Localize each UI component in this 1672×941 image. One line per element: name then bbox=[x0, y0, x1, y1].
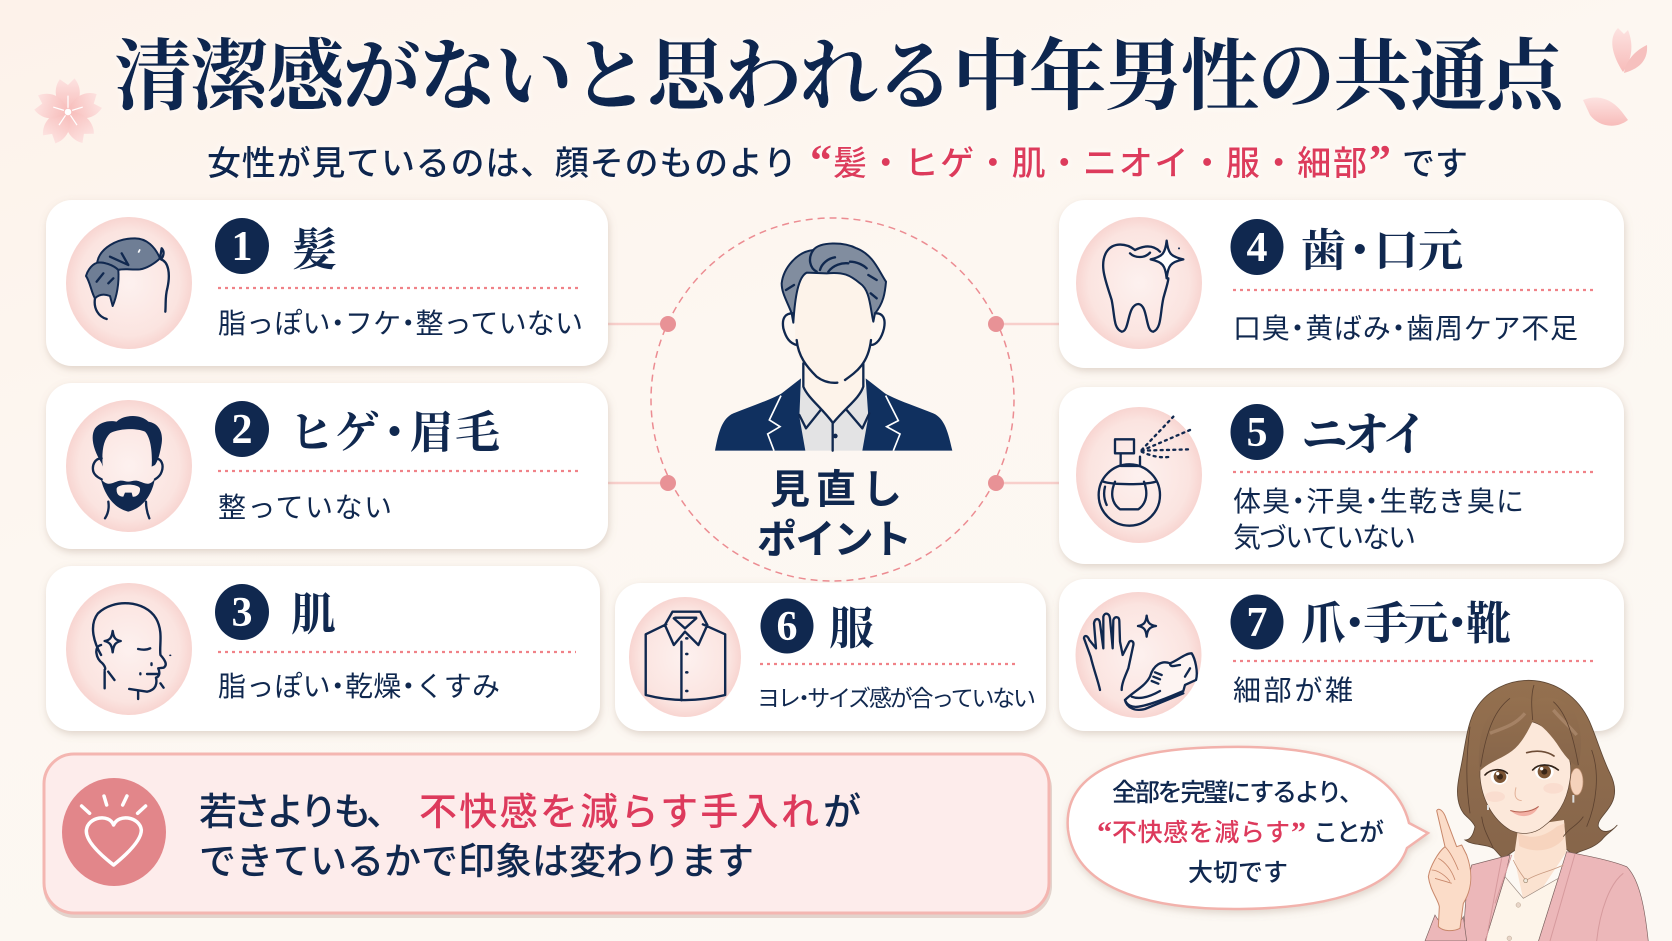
subtitle: “ bbox=[810, 136, 832, 185]
subtitle: 髪・ヒゲ・肌・ニオイ・服・細部 bbox=[833, 145, 1367, 183]
heading: beard and brows: ヒゲ・眉毛 bbox=[289, 396, 500, 461]
icon: hand and shoe bbox=[1084, 614, 1197, 710]
number badge 5 bbox=[1230, 404, 1284, 460]
icon: beard bbox=[93, 416, 163, 518]
panel: 3 skin bbox=[46, 566, 600, 731]
bubble text: ことが bbox=[1313, 819, 1384, 847]
description: teeth and mouth: 口臭・黄ばみ・歯周ケア不足 bbox=[1233, 313, 1578, 344]
panel: 7 nails hands shoes bbox=[1059, 579, 1624, 731]
center label: 見直し bbox=[770, 468, 902, 512]
illustration: man in suit bbox=[715, 244, 952, 451]
heading: nails hands shoes: 爪・手元・靴 bbox=[1301, 587, 1511, 652]
number badge 2 bbox=[215, 401, 269, 457]
panel: 1 hair bbox=[46, 200, 608, 366]
connector lines bbox=[608, 324, 1059, 483]
heading: skin: 肌 bbox=[291, 578, 336, 643]
heading: odor: ニオイ bbox=[1301, 398, 1429, 465]
subtitle bbox=[207, 136, 1468, 185]
icon: cherry blossom left bbox=[32, 78, 104, 146]
bubble text: ” bbox=[1291, 816, 1306, 849]
panel: 5 odor bbox=[1059, 387, 1624, 564]
icon: heart bbox=[62, 778, 166, 886]
panel: 6 clothes bbox=[615, 583, 1046, 731]
number badge 4: 4 bbox=[1246, 225, 1268, 271]
description: odor bbox=[1233, 486, 1524, 553]
callout text bbox=[199, 792, 861, 882]
central focus circle bbox=[651, 218, 1014, 581]
description: skin: 脂っぽい・乾燥・くすみ bbox=[218, 671, 500, 702]
icon: face profile bbox=[93, 603, 171, 699]
icon: shirt bbox=[646, 612, 725, 700]
subtitle: 女性が見ているのは、顔そのものより bbox=[207, 145, 797, 183]
icon: perfume bottle bbox=[1099, 417, 1190, 526]
center label: ポイント bbox=[757, 518, 912, 562]
callout text: 若さよりも、 bbox=[199, 792, 404, 834]
number badge 1 bbox=[215, 218, 269, 274]
number badge 5: 5 bbox=[1246, 410, 1268, 456]
heading: teeth and mouth: 歯・口元 bbox=[1301, 214, 1463, 279]
description: odor: 体臭・汗臭・生乾き臭に bbox=[1233, 486, 1524, 517]
number badge 2: 2 bbox=[232, 407, 252, 453]
subtitle: ” bbox=[1369, 136, 1391, 185]
speech bubble bbox=[1068, 747, 1428, 909]
number badge 4 bbox=[1230, 219, 1284, 275]
number badge 6: 6 bbox=[776, 604, 798, 650]
illustration: woman pointing bbox=[1425, 680, 1648, 941]
number badge 3: 3 bbox=[232, 590, 252, 636]
description: nails hands shoes: 細部が雑 bbox=[1233, 675, 1353, 706]
icon: tooth bbox=[1103, 241, 1183, 332]
callout text: できているかで印象は変わります bbox=[199, 841, 754, 882]
icon: hair bbox=[86, 238, 169, 319]
center label bbox=[757, 468, 912, 562]
icon: cherry petals right bbox=[1583, 28, 1647, 126]
number badge 7 bbox=[1230, 594, 1284, 650]
description: beard and brows: 整っていない bbox=[218, 492, 392, 523]
bubble text: 全部を完璧にするより、 bbox=[1112, 779, 1364, 807]
subtitle: です bbox=[1402, 145, 1468, 182]
bubble text: “ bbox=[1097, 816, 1112, 849]
bubble text: 大切です bbox=[1188, 859, 1288, 887]
description: clothes: ヨレ・サイズ感が合っていない bbox=[757, 685, 1036, 711]
panel: 4 teeth and mouth bbox=[1059, 200, 1624, 368]
callout text: 不快感を減らす手入れ bbox=[419, 792, 819, 834]
callout banner bbox=[43, 754, 1052, 918]
number badge 3 bbox=[215, 584, 269, 640]
panel: 2 beard and brows bbox=[46, 383, 608, 549]
description: odor: 気づいていない bbox=[1233, 522, 1416, 553]
bubble text: 不快感を減らす bbox=[1112, 819, 1290, 847]
number badge 1: 1 bbox=[232, 224, 252, 270]
callout text: が bbox=[823, 792, 861, 834]
number badge 6 bbox=[760, 598, 814, 654]
heading: hair: 髪 bbox=[292, 213, 337, 278]
description: hair: 脂っぽい・フケ・整っていない bbox=[218, 308, 583, 339]
bubble text bbox=[1097, 779, 1384, 887]
title: 清潔感がないと思われる中年男性の共通点 bbox=[114, 14, 1569, 126]
number badge 7: 7 bbox=[1246, 600, 1268, 646]
heading: clothes: 服 bbox=[829, 592, 874, 657]
